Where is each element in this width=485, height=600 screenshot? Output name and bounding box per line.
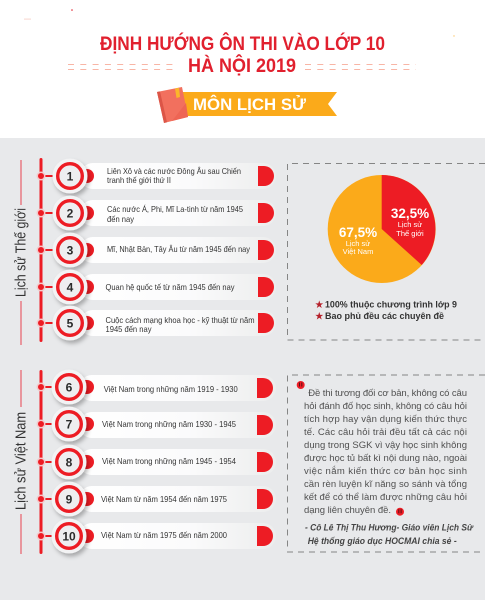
bullet notes: ★ bbox=[315, 300, 324, 310]
bullet notes bbox=[315, 300, 457, 322]
quote text: việc nắm kiến thức cơ bản học sinh bbox=[304, 466, 467, 477]
pie chart: 67,5% bbox=[339, 225, 377, 240]
item 5: 5 bbox=[67, 316, 74, 330]
item 2: đến nay bbox=[107, 214, 135, 224]
item 9: Việt Nam từ năm 1954 đến năm 1975 bbox=[101, 494, 227, 504]
item 5: 1945 đến nay bbox=[106, 324, 152, 334]
pie chart: Việt Nam bbox=[343, 247, 373, 256]
item 10: 10 bbox=[62, 530, 76, 544]
item 6: Việt Nam trong những năm 1919 - 1930 bbox=[104, 384, 238, 394]
item 7: Việt Nam trong những năm 1930 - 1945 bbox=[102, 419, 236, 429]
quote attribution bbox=[305, 522, 474, 547]
quote text: dụng trong SGK vì vậy học sinh không bbox=[304, 440, 467, 451]
bullet notes: 100% thuộc chương trình lớp 9 bbox=[325, 300, 457, 310]
item 2: 2 bbox=[67, 206, 74, 220]
item 1: 1 bbox=[67, 170, 74, 184]
item 4: 4 bbox=[67, 280, 74, 294]
item 9: 9 bbox=[66, 492, 73, 506]
timeline: Lịch sử Thế giới bbox=[36, 158, 276, 342]
quote text: tích hợp hay vận dụng kiến thức thực bbox=[304, 414, 467, 425]
item 1: tranh thế giới thứ II bbox=[107, 175, 171, 185]
icon: closing quote bbox=[396, 508, 404, 516]
item 4: Quan hệ quốc tế từ năm 1945 đến nay bbox=[106, 282, 235, 292]
item 1 bbox=[36, 158, 276, 194]
item 8: Việt Nam trong những năm 1945 - 1954 bbox=[102, 456, 236, 466]
quote text: hỏi đánh đố học sinh, không có câu hỏi bbox=[304, 401, 467, 412]
item 7 bbox=[36, 406, 276, 442]
section label: Lịch sử Thế giới: Lịch sử Thế giới bbox=[14, 208, 30, 297]
title bbox=[100, 33, 385, 77]
item 6: 6 bbox=[66, 380, 73, 394]
item 2 bbox=[36, 196, 276, 230]
timeline: Lịch sử Việt Nam bbox=[36, 370, 276, 554]
item 3: 3 bbox=[67, 244, 74, 258]
title: HÀ NỘI 2019 bbox=[188, 55, 296, 77]
item 6 bbox=[36, 370, 276, 404]
item 8: 8 bbox=[66, 456, 73, 470]
pie chart: 32,5% bbox=[391, 206, 429, 221]
pie chart: Lịch sử bbox=[398, 220, 422, 229]
item 4 bbox=[36, 270, 276, 304]
item 10: Việt Nam từ năm 1975 đến năm 2000 bbox=[101, 530, 227, 540]
quote text: dạng liên chuyên đề. bbox=[304, 505, 391, 516]
section label: Lịch sử Việt Nam: Lịch sử Việt Nam bbox=[14, 412, 30, 510]
quote text: tế. Các câu hỏi trải đều tất cả các nội bbox=[304, 427, 467, 438]
item 3 bbox=[36, 232, 276, 268]
banner: môn lịch sử bbox=[157, 87, 337, 123]
banner: môn lịch sử: MÔN LỊCH SỬ bbox=[193, 95, 307, 114]
quote attribution: Hệ thống giáo dục HOCMAI chia sẻ - bbox=[308, 536, 457, 547]
quote text: được học tủ bất kì nội dung nào, ngoài bbox=[304, 453, 467, 464]
icon: opening quote bbox=[297, 381, 305, 389]
title: ĐỊNH HƯỚNG ÔN THI VÀO LỚP 10 bbox=[100, 33, 385, 55]
quote text: cần rèn luyện kĩ năng so sánh và tổng bbox=[304, 479, 467, 490]
quote text bbox=[304, 388, 467, 516]
bullet notes: Bao phủ đều các chuyên đề bbox=[325, 311, 444, 322]
quote text: Đề thi tương đối cơ bản, không có câu bbox=[308, 388, 467, 399]
item 5 bbox=[36, 306, 276, 340]
item 9 bbox=[36, 482, 276, 516]
pie chart bbox=[328, 175, 436, 283]
item 7: 7 bbox=[66, 418, 73, 432]
quote text: kết để có thể làm được những câu hỏi bbox=[304, 492, 467, 503]
item 3: Mĩ, Nhật Bản, Tây Âu từ năm 1945 đến nay bbox=[107, 244, 251, 254]
item 1: Liên Xô và các nước Đông Âu sau Chiến bbox=[107, 166, 241, 176]
panel: teacher quote bbox=[288, 375, 485, 552]
item 5: Cuộc cách mạng khoa học - kỹ thuật từ năm bbox=[106, 315, 255, 325]
pie chart: Thế giới bbox=[396, 229, 424, 238]
item 8 bbox=[36, 444, 276, 480]
item 10 bbox=[36, 518, 276, 554]
bullet notes: ★ bbox=[315, 311, 324, 321]
panel: pie chart and notes bbox=[288, 164, 485, 340]
item 2: Các nước Á, Phi, Mĩ La-tinh từ năm 1945 bbox=[107, 204, 243, 214]
pie chart: Lịch sử bbox=[346, 239, 370, 248]
icon: book bbox=[157, 87, 188, 123]
